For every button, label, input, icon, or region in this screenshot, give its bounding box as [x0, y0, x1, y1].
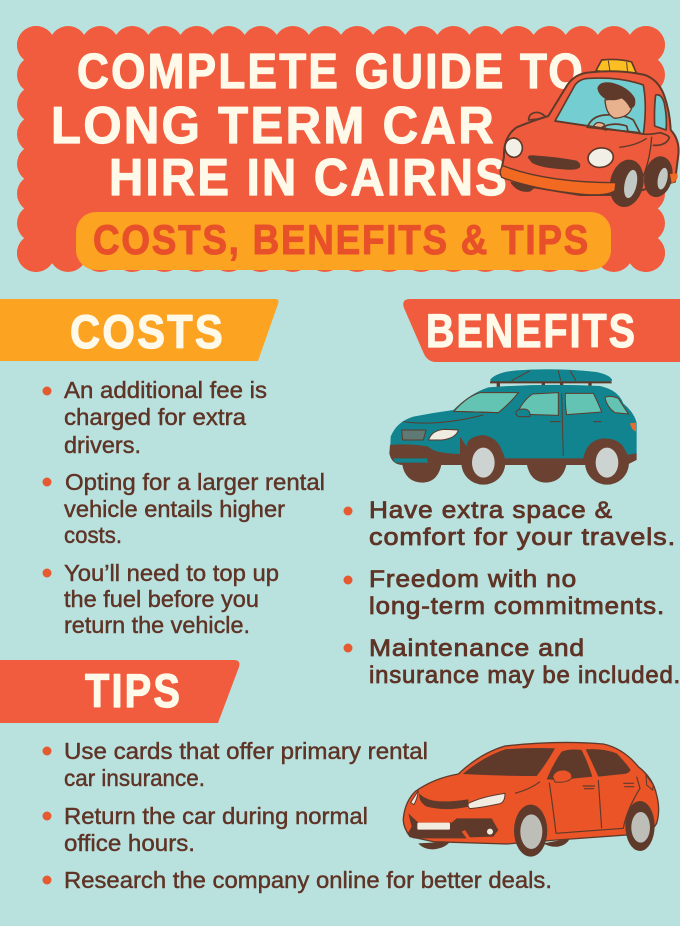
grille — [528, 155, 580, 170]
costs list — [42, 377, 325, 638]
costs header: COSTS — [70, 305, 225, 358]
roof box — [490, 369, 613, 383]
bullet: extra drivers: drivers. — [64, 432, 141, 458]
body — [403, 742, 659, 844]
benefits list — [344, 497, 680, 689]
windows — [463, 748, 555, 776]
wheels — [640, 154, 676, 200]
bullet: research: Research the company online for better deals. — [64, 867, 552, 893]
driver — [587, 115, 640, 133]
tips header: TIPS — [85, 664, 182, 717]
rear wheels under body — [402, 463, 442, 483]
bullet: cards: car insurance. — [64, 765, 205, 791]
mirror — [553, 770, 572, 782]
bullet: maintenance: Maintenance and — [369, 635, 585, 662]
title: COMPLETE GUIDE TO — [77, 45, 585, 99]
bullet: extra drivers: charged for extra — [64, 404, 246, 430]
bullet: maintenance: insurance may be included. — [369, 662, 680, 689]
bullet: larger vehicle: vehicle entails higher — [64, 496, 285, 522]
headlights — [503, 137, 524, 159]
bullet: top up fuel: the fuel before you — [64, 586, 259, 612]
header banner with scalloped edge — [27, 36, 655, 262]
mirror and door lines — [516, 409, 530, 417]
bullet: extra space: Have extra space & — [369, 497, 613, 524]
windows — [454, 393, 518, 413]
bullet: larger vehicle: costs. — [64, 522, 122, 548]
bullet: top up fuel — [42, 560, 279, 638]
bullet: top up fuel: return the vehicle. — [64, 612, 250, 638]
bullet: maintenance — [344, 635, 680, 689]
bullet: freedom: Freedom with no — [369, 566, 577, 593]
front grille — [407, 813, 498, 838]
body — [390, 385, 637, 463]
bullet: return — [42, 803, 368, 856]
bullet: larger vehicle — [42, 469, 325, 548]
bullet: freedom: long-term commitments. — [369, 593, 665, 620]
wheels — [461, 441, 505, 485]
bumper — [500, 166, 616, 195]
wheels — [514, 805, 547, 857]
lights and grille — [429, 429, 458, 440]
windshield — [555, 78, 645, 134]
door lines — [515, 777, 640, 833]
bullet: extra drivers — [42, 377, 267, 458]
tips header — [0, 660, 239, 723]
title: HIRE IN CAIRNS — [109, 149, 509, 207]
bullet: cards: Use cards that offer primary rental — [64, 738, 428, 764]
icon: teal SUV with roof box — [389, 369, 637, 485]
bullet: extra drivers: An additional fee is — [64, 377, 267, 403]
benefits header: BENEFITS — [426, 304, 637, 357]
side window — [654, 95, 666, 130]
bullet: cards — [42, 738, 428, 791]
bullet: freedom — [344, 566, 665, 620]
bullet: larger vehicle: Opting for a larger rental — [65, 469, 325, 495]
title: LONG TERM CAR — [51, 97, 496, 155]
icon: orange hatchback — [403, 742, 659, 857]
bullet: return: office hours. — [64, 830, 195, 856]
tips list — [42, 738, 552, 893]
costs header — [0, 299, 279, 361]
bullet: extra space — [344, 497, 676, 551]
bullet: return: Return the car during normal — [64, 803, 368, 829]
hood crease and headlights — [419, 793, 468, 809]
bullet: top up fuel: You’ll need to top up — [64, 560, 279, 586]
icon: red taxi with driver — [500, 59, 679, 210]
subtitle pill: COSTS, BENEFITS & TIPS — [93, 216, 590, 263]
bullet: extra space: comfort for your travels. — [369, 524, 676, 551]
title — [51, 45, 585, 207]
hood line and fender — [555, 121, 669, 145]
